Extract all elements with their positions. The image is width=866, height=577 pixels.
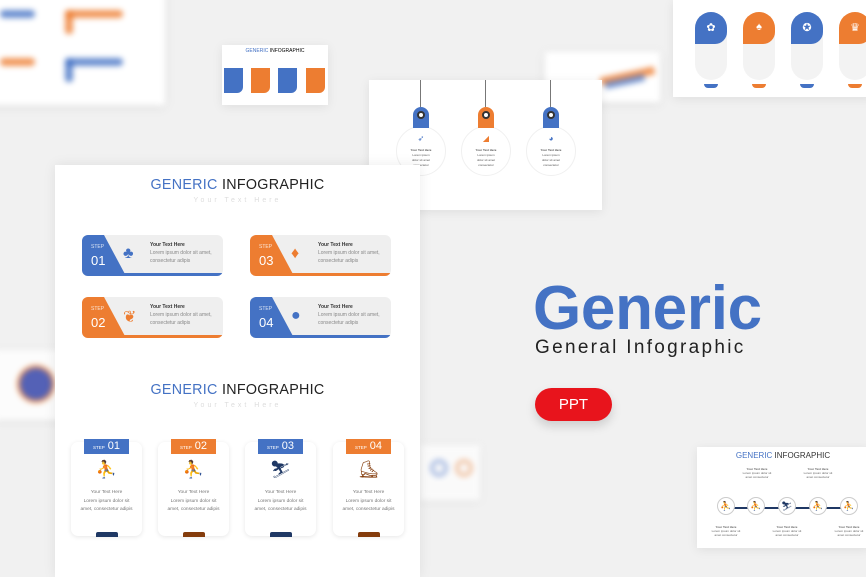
vertical card 04: ⛸ xyxy=(358,460,379,479)
slide: timeline: ⛷ xyxy=(781,501,793,511)
slide: timeline: Your Text Here xyxy=(839,525,859,529)
vertical card 02: amet, consectetur adipis xyxy=(168,507,220,512)
main slide xyxy=(55,165,420,577)
slide: top-right award cards: ✪ xyxy=(802,22,812,34)
step card 04: consectetur adipis xyxy=(318,320,358,326)
step card 04: Lorem ipsum dolor sit amet, xyxy=(318,312,380,318)
step card 03: 03 xyxy=(259,253,273,268)
vertical card 01 xyxy=(71,442,142,536)
tag 2: dolor sit amet xyxy=(477,158,495,162)
tag 1: ➶ xyxy=(418,134,424,143)
tag 1: dolor sit amet xyxy=(412,158,430,162)
tag 2: Lorem ipsum xyxy=(477,153,495,157)
slide: timeline: Lorem ipsum dolor sit xyxy=(712,529,740,533)
tag 2: Your Text Here xyxy=(476,148,496,152)
step card 01: Your Text Here xyxy=(150,242,185,248)
vertical card 02 xyxy=(158,442,229,536)
tag 3: dolor sit amet xyxy=(542,158,560,162)
vertical card 02: Lorem ipsum dolor sit xyxy=(171,498,216,504)
slide: timeline xyxy=(697,447,866,548)
step card 03: Lorem ipsum dolor sit amet, xyxy=(318,250,380,256)
vertical card 02: STEP 02 xyxy=(180,440,207,452)
vertical card 01: ⛹ xyxy=(96,460,117,479)
tag 1 xyxy=(396,80,446,176)
tag 3: Lorem ipsum xyxy=(542,153,560,157)
vertical card 03: STEP 03 xyxy=(267,440,294,452)
tag 2 xyxy=(461,80,511,176)
step card 03: ♦ xyxy=(291,245,299,262)
tag 3: consectetur xyxy=(543,163,559,167)
slide: hanging tags xyxy=(369,80,602,210)
slide: top-right award cards: ✿ xyxy=(706,22,716,34)
slide: timeline: Your Text Here xyxy=(777,525,797,529)
step card 01 xyxy=(82,235,223,276)
button: PPT xyxy=(535,388,612,421)
vertical card 02: ⛹ xyxy=(183,460,204,479)
background slide: blurred top-left xyxy=(0,0,165,105)
step card 04: STEP xyxy=(259,306,272,312)
slide: timeline: ⛹ xyxy=(720,501,732,511)
step card 04: ● xyxy=(291,307,301,324)
step card 04: Your Text Here xyxy=(318,304,353,310)
slide: top-right award cards xyxy=(673,0,866,97)
vertical card 04: Lorem ipsum dolor sit xyxy=(346,498,391,504)
slide: timeline: Your Text Here xyxy=(808,467,828,471)
slide: timeline: amet consectetur xyxy=(837,533,860,537)
vertical card 03 xyxy=(245,442,316,536)
step card 02: Your Text Here xyxy=(150,304,185,310)
vertical card 01: Lorem ipsum dolor sit xyxy=(84,498,129,504)
slide: top-right award cards: ♛ xyxy=(850,22,860,34)
small slide: four tabs xyxy=(222,45,328,105)
background slide: blurred chart xyxy=(545,52,660,102)
vertical card 03: amet, consectetur adipis xyxy=(254,507,306,512)
step card 02: consectetur adipis xyxy=(150,320,190,326)
background slide: blurred pins xyxy=(420,445,480,500)
slide: timeline: ⛹ xyxy=(812,501,824,511)
slide: timeline: ⛹ xyxy=(843,501,855,511)
slide: timeline: amet consectetur xyxy=(745,475,768,479)
button: PPT: PPT xyxy=(559,396,588,413)
tag 3 xyxy=(526,80,576,176)
step card 01: consectetur adipis xyxy=(150,258,190,264)
slide: timeline: amet consectetur xyxy=(714,533,738,537)
subheading: General Infographic xyxy=(535,337,746,358)
step card 01: STEP xyxy=(91,244,104,250)
step card 03 xyxy=(250,235,391,276)
slide: top-right award cards: ♠ xyxy=(756,21,762,33)
vertical card 01: STEP 01 xyxy=(93,440,120,452)
vertical card 03: Lorem ipsum dolor sit xyxy=(258,498,303,504)
step card 03: STEP xyxy=(259,244,272,250)
step card 04 xyxy=(250,297,391,338)
tag 2: consectetur xyxy=(478,163,494,167)
slide: timeline: GENERIC INFOGRAPHIC xyxy=(736,451,830,460)
vertical card 04 xyxy=(333,442,404,536)
slide: timeline: amet consectetur xyxy=(775,533,798,537)
tag 3: Your Text Here xyxy=(541,148,561,152)
step card 03: Your Text Here xyxy=(318,242,353,248)
background slide: blurred circle xyxy=(0,350,90,420)
step card 02 xyxy=(82,297,223,338)
subtitle 2: Your Text Here xyxy=(194,402,281,409)
step card 02: Lorem ipsum dolor sit amet, xyxy=(150,312,212,318)
title 1: GENERIC INFOGRAPHIC xyxy=(150,177,325,193)
vertical card 03: Your Text Here xyxy=(265,490,296,495)
vertical card 01: amet, consectetur adipis xyxy=(80,507,132,512)
step card 03: consectetur adipis xyxy=(318,258,358,264)
vertical card 04: Your Text Here xyxy=(353,490,384,495)
slide: timeline: Lorem ipsum dolor sit xyxy=(773,529,801,533)
step card 01: 01 xyxy=(91,253,105,268)
title 2: GENERIC INFOGRAPHIC xyxy=(150,382,325,398)
slide: timeline: Lorem ipsum dolor sit xyxy=(804,471,832,475)
heading: Generic: Generic xyxy=(533,274,762,343)
step card 02: STEP xyxy=(91,306,104,312)
vertical card 04: STEP 04 xyxy=(355,440,382,452)
vertical card 01: Your Text Here xyxy=(91,490,122,495)
vertical card 04: amet, consectetur adipis xyxy=(342,507,394,512)
step card 01: ♣ xyxy=(123,245,134,262)
step card 02: 02 xyxy=(91,315,105,330)
slide: timeline: amet consectetur xyxy=(806,475,830,479)
step card 02: ❦ xyxy=(123,309,136,326)
slide: timeline: Your Text Here xyxy=(716,525,736,529)
step card 04: 04 xyxy=(259,315,273,330)
small slide: four tabs: GENERIC INFOGRAPHIC xyxy=(246,48,304,54)
vertical card 02: Your Text Here xyxy=(178,490,209,495)
vertical card 03: ⛷ xyxy=(270,460,291,479)
tag 1: Lorem ipsum xyxy=(412,153,430,157)
step card 01: Lorem ipsum dolor sit amet, xyxy=(150,250,212,256)
tag 1: Your Text Here xyxy=(411,148,431,152)
slide: timeline: Your Text Here xyxy=(747,467,767,471)
tag 1: consectetur xyxy=(413,163,429,167)
tag 3: ◕ xyxy=(549,134,553,143)
tag 2: ◢ xyxy=(483,134,489,143)
slide: timeline: Lorem ipsum dolor sit xyxy=(835,529,863,533)
slide: timeline: Lorem ipsum dolor sit xyxy=(743,471,771,475)
slide: timeline: ⛹ xyxy=(750,501,762,511)
subtitle 1: Your Text Here xyxy=(194,197,281,204)
